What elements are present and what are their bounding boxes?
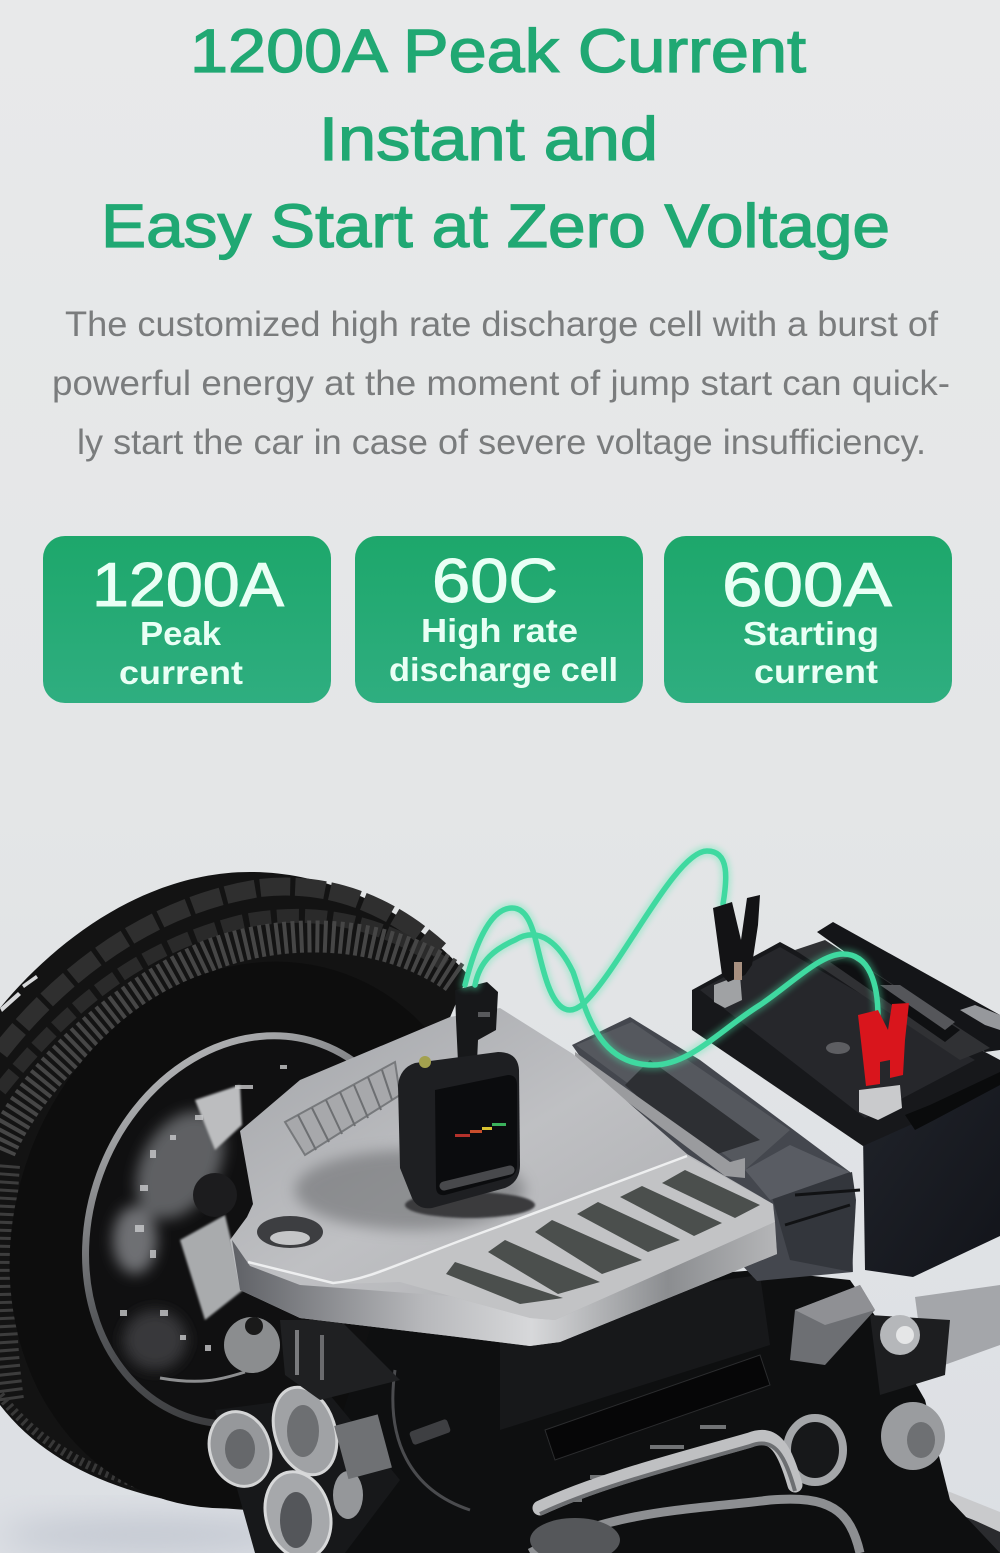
filler cap hole [257,1216,323,1248]
lower vent slots [446,1170,760,1304]
wheel rim and brake [32,988,474,1472]
tire [0,872,566,1553]
right background parts [890,1285,1000,1553]
screen colour scale [455,1123,506,1137]
status light [419,1056,431,1068]
stat card: 1200A peak current: 1200A [92,551,285,620]
description text: ly start the car in case of severe voltage insufficiency. [77,423,926,462]
right engine bracket and pulley [530,1285,950,1553]
stat card: 60C high rate discharge cell: discharge cell [389,651,618,688]
battery [692,922,1000,1277]
stat card: 60C high rate discharge cell [355,536,643,703]
stat card: 1200A peak current: current [119,654,243,691]
stat card: 60C high rate discharge cell: High rate [421,612,578,649]
device body [398,1052,520,1208]
title: Easy Start at Zero Voltage [101,192,890,260]
stat card: 600A starting current: Starting [743,615,879,652]
red battery clamp [858,1003,909,1086]
jump starter device [398,982,535,1218]
engine lower block [330,1270,1000,1553]
title: Instant and [319,105,658,173]
description text: powerful energy at the moment of jump start can quick- [52,364,950,403]
button row [444,1170,510,1186]
engine pulleys and belts [200,1317,400,1553]
stat card: 600A starting current: 600A [722,551,893,620]
stat card: 600A starting current: current [754,653,878,690]
metal engine cover plate [230,1008,777,1346]
title [101,17,890,260]
stat card: 600A starting current [664,536,952,703]
title: 1200A Peak Current [190,17,806,85]
connector head [455,982,498,1062]
green jumper cables [465,851,878,1065]
stat card: 1200A peak current: Peak [140,615,222,652]
illustration: car chassis with jump starter [0,851,1000,1553]
stat card: 1200A peak current [43,536,331,703]
description text: The customized high rate discharge cell with a burst of [65,305,938,344]
stat card: 60C high rate discharge cell: 60C [432,547,558,616]
description text [52,305,950,462]
black battery clamp [713,895,760,982]
upper vent grille [285,1062,400,1155]
engine cover mid block [572,1017,860,1281]
